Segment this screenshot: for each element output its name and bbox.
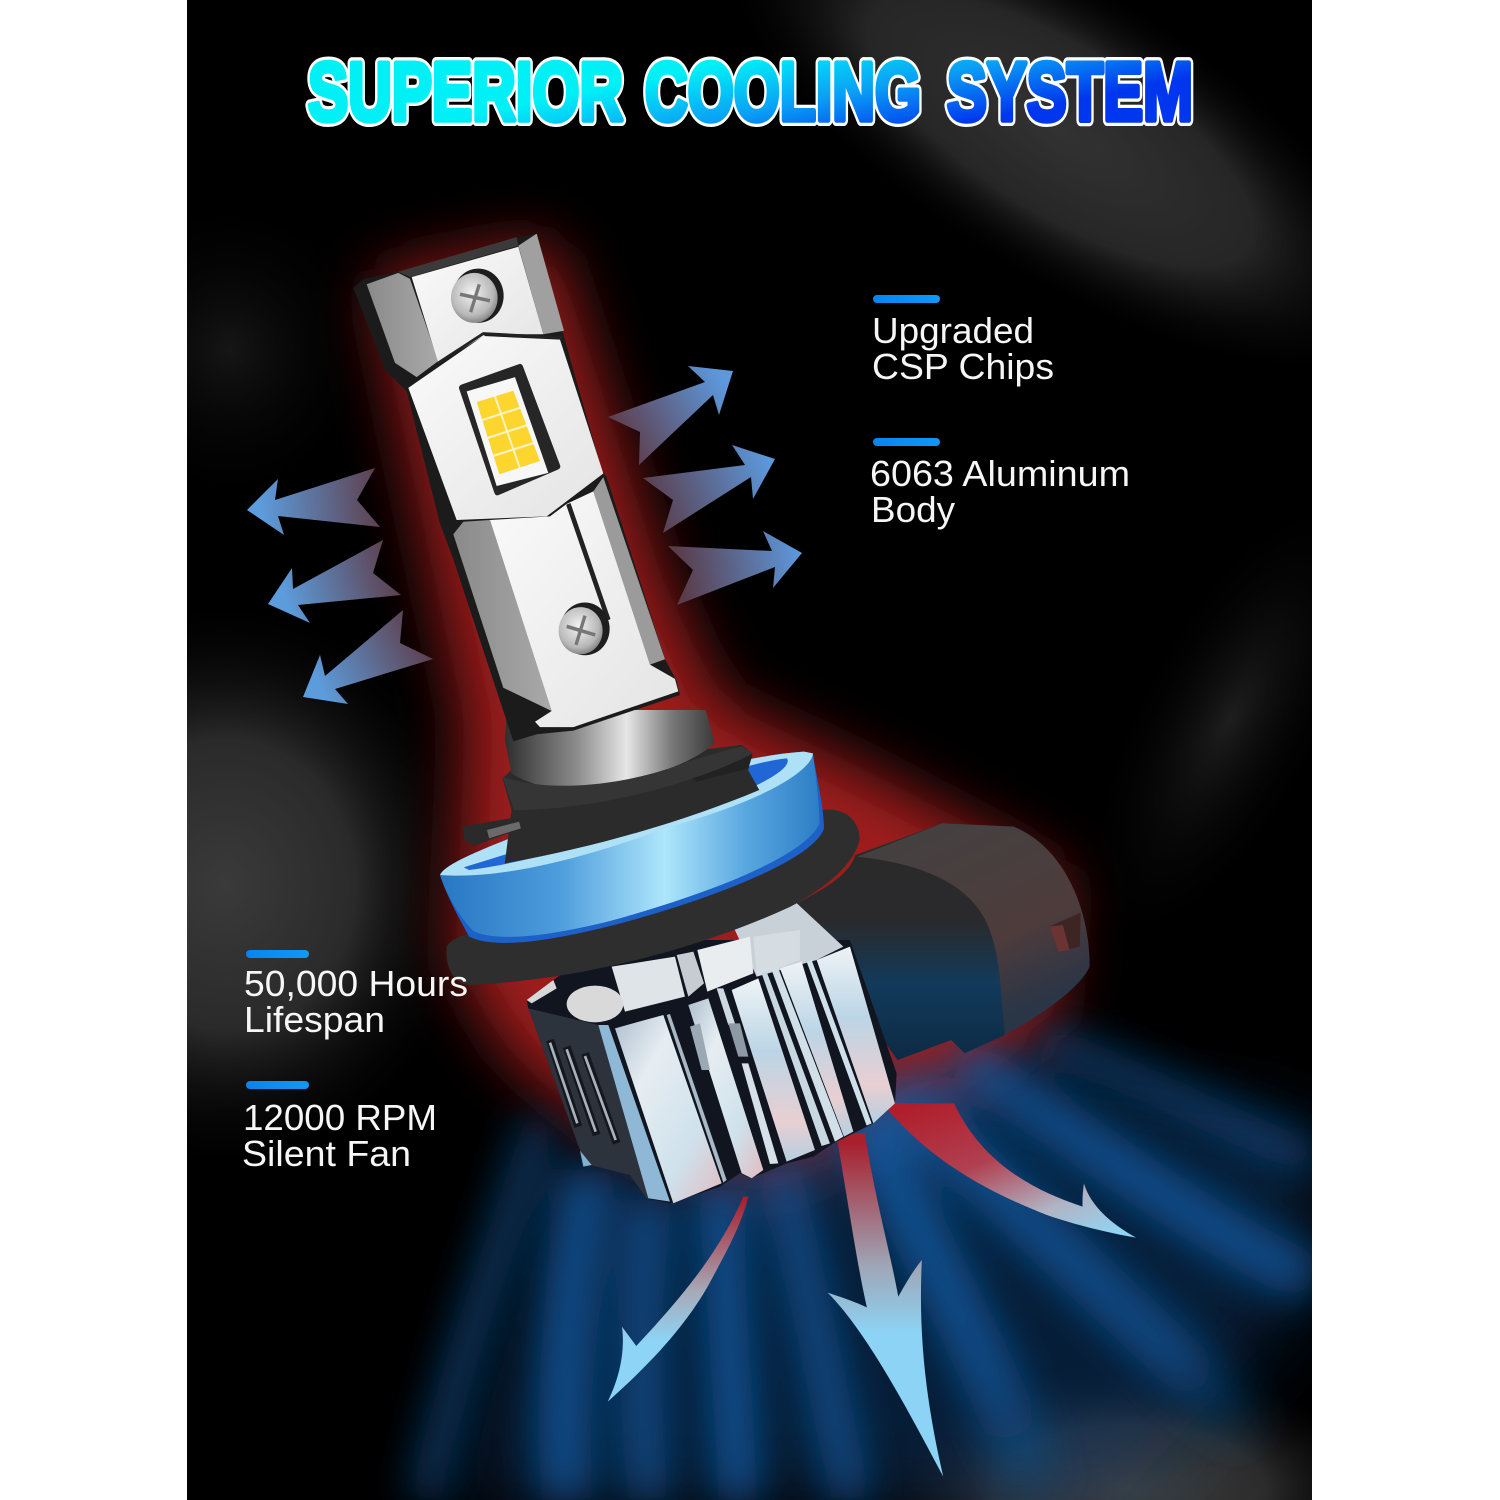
red heat glow behind bulb <box>400 268 1040 1170</box>
slot line <box>568 504 608 620</box>
callout: Upgraded CSP Chips: CSP Chips <box>872 346 1054 387</box>
callout: 6063 Aluminum Body: 6063 Aluminum <box>870 453 1130 494</box>
blue airflow streaks <box>425 1040 1312 1500</box>
dark background panel <box>187 0 1312 1500</box>
upper collar of heat sink <box>527 900 843 1022</box>
fins <box>598 947 895 1203</box>
white top plate <box>412 247 543 363</box>
infographic canvas <box>187 0 1312 1500</box>
upper heat plate body <box>353 234 680 741</box>
arrow: left <box>608 1197 748 1402</box>
arrow: centre <box>828 1133 943 1477</box>
title: Superior Cooling System: SYSTEM <box>947 45 1193 138</box>
title: Superior Cooling System: COOLING <box>645 45 921 138</box>
LED bulb <box>353 234 897 1203</box>
centre white plate <box>408 336 603 520</box>
title: Superior Cooling System: SUPERIOR <box>308 45 623 138</box>
bottom screw <box>559 602 610 655</box>
callout: Upgraded CSP Chips <box>872 295 1054 387</box>
callout: 50,000 Hours Lifespan: Lifespan <box>244 999 385 1040</box>
connector plug <box>791 823 1090 1060</box>
neck and black base collar <box>462 710 759 863</box>
heat dissipation arrows: right side <box>608 366 802 605</box>
callout: 6063 Aluminum Body <box>870 438 1130 530</box>
grey side faces <box>367 234 665 711</box>
heat dissipation arrows: left side <box>247 468 433 704</box>
blue O-ring <box>440 752 824 943</box>
callout: 12000 RPM Silent Fan <box>242 1081 437 1174</box>
callout: 50,000 Hours Lifespan: 50,000 Hours <box>244 963 468 1004</box>
title: Superior Cooling System: COOLING <box>645 45 921 138</box>
lower heat sink and fins <box>527 900 897 1203</box>
lock ring flange <box>446 809 860 985</box>
arrow: right <box>883 1103 1136 1238</box>
lower white plate <box>490 491 678 727</box>
bottom cooling arrows <box>608 1103 1136 1477</box>
callout: 50,000 Hours Lifespan <box>244 950 468 1040</box>
callout: 12000 RPM Silent Fan: Silent Fan <box>242 1133 411 1174</box>
LED chip module <box>462 367 557 492</box>
side vent panel <box>528 1008 660 1200</box>
top screw <box>451 269 504 323</box>
callout: 6063 Aluminum Body: Body <box>871 489 955 530</box>
title: Superior Cooling System: SYSTEM <box>947 45 1193 138</box>
title: Superior Cooling System <box>308 45 1193 138</box>
callout: 12000 RPM Silent Fan: 12000 RPM <box>243 1097 437 1138</box>
callout: Upgraded CSP Chips: Upgraded <box>872 310 1034 351</box>
title: Superior Cooling System: SUPERIOR <box>308 45 623 138</box>
